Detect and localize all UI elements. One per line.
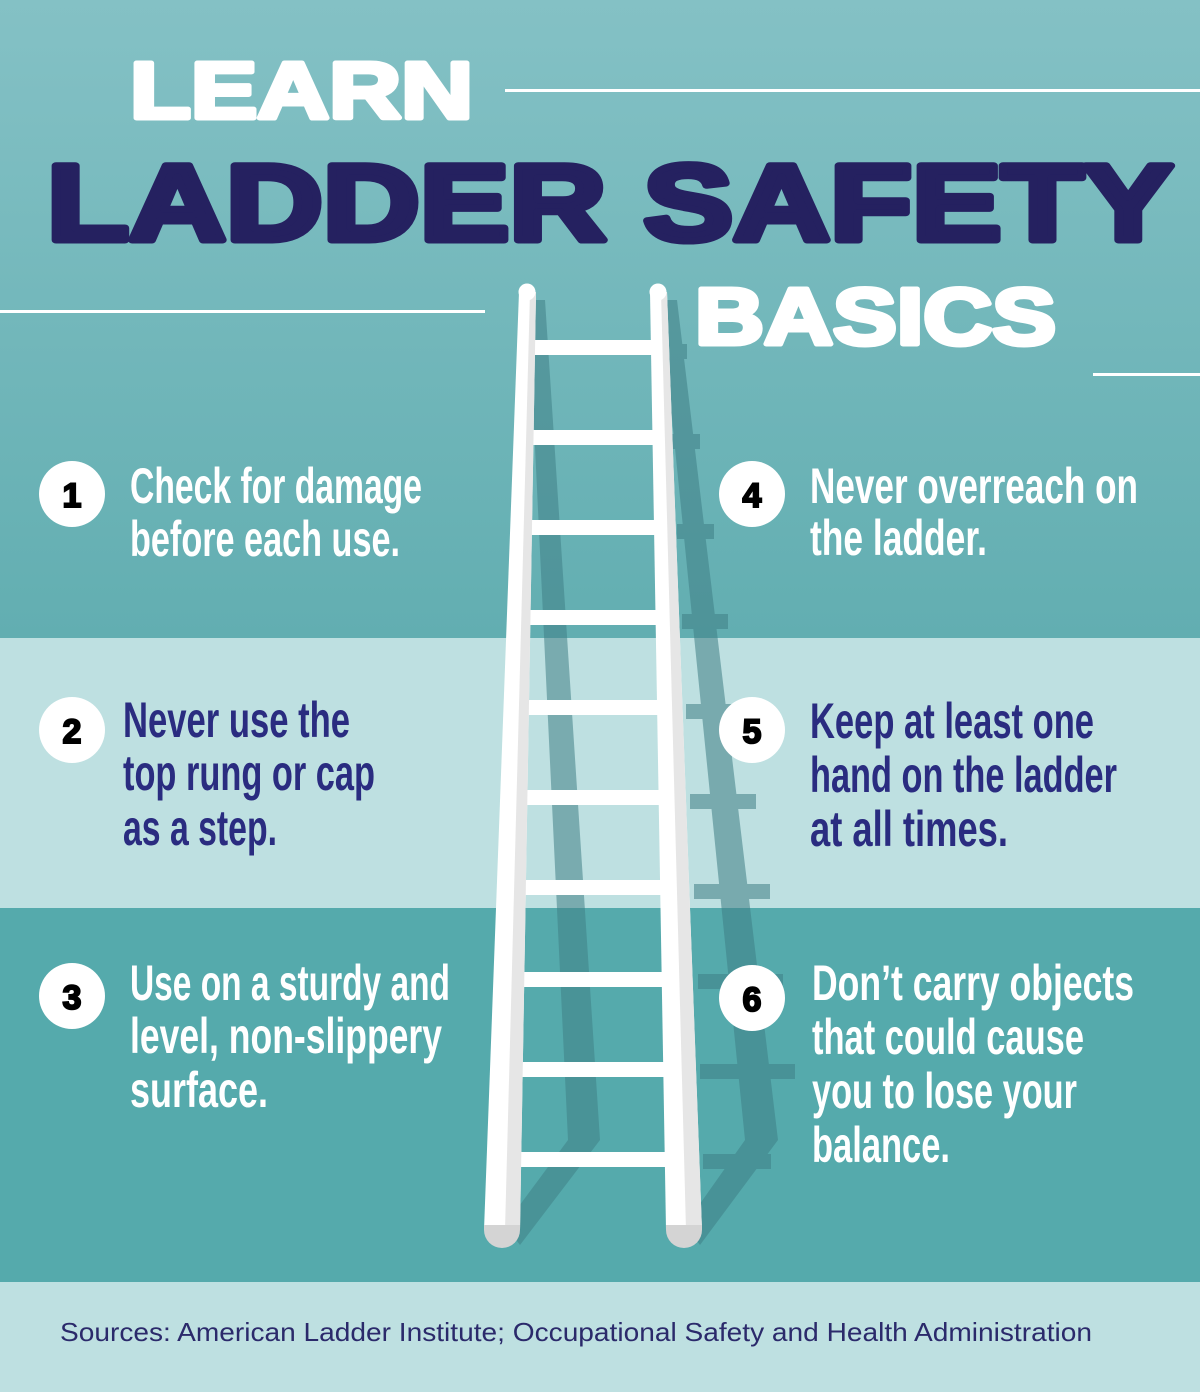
title: LADDER SAFETY bbox=[47, 142, 1173, 263]
tip 1: 1 bbox=[63, 477, 81, 515]
tip 2: Never use the bbox=[123, 692, 350, 748]
tip 5: 5 bbox=[743, 713, 761, 751]
ladder bbox=[484, 284, 795, 1248]
tip 1: Check for damage bbox=[130, 458, 422, 514]
tip 3: level, non-slippery bbox=[130, 1008, 442, 1064]
tip 6: that could cause bbox=[812, 1009, 1084, 1065]
tip 5: at all times. bbox=[810, 801, 1008, 857]
sources footer text: Sources: American Ladder Institute; Occupational Safety and Health Administration bbox=[60, 1317, 1092, 1347]
tip 2: 2 bbox=[63, 713, 81, 751]
tip 4: 4 bbox=[743, 477, 762, 515]
tip 6: 6 bbox=[743, 981, 761, 1019]
background top band bbox=[0, 0, 1200, 638]
tip 3: 3 bbox=[63, 979, 81, 1017]
tip 2 bbox=[39, 692, 375, 856]
title: BASICS bbox=[695, 272, 1056, 361]
tip 4 bbox=[719, 458, 1138, 566]
tip 4: the ladder. bbox=[810, 510, 987, 566]
tip 1 bbox=[39, 458, 422, 567]
tip 2: as a step. bbox=[123, 800, 277, 856]
background middle band bbox=[0, 638, 1200, 908]
tip 3: surface. bbox=[130, 1062, 268, 1118]
rungs bbox=[512, 340, 674, 1167]
background bottom band bbox=[0, 908, 1200, 1282]
tip 1: before each use. bbox=[130, 511, 400, 567]
footer band bbox=[0, 1282, 1200, 1392]
ladder shadow bbox=[505, 300, 795, 1245]
tip 5 bbox=[719, 693, 1117, 857]
tip 6 bbox=[719, 955, 1134, 1173]
title: LEARN bbox=[130, 46, 473, 135]
left rail bbox=[484, 292, 536, 1230]
tip 6: balance. bbox=[812, 1117, 950, 1173]
tip 2: top rung or cap bbox=[123, 745, 375, 801]
right rail bbox=[650, 292, 702, 1230]
tip 3 bbox=[39, 955, 450, 1118]
title bbox=[47, 46, 1173, 361]
tip 3: Use on a sturdy and bbox=[130, 955, 450, 1011]
tip 6: you to lose your bbox=[812, 1063, 1077, 1119]
